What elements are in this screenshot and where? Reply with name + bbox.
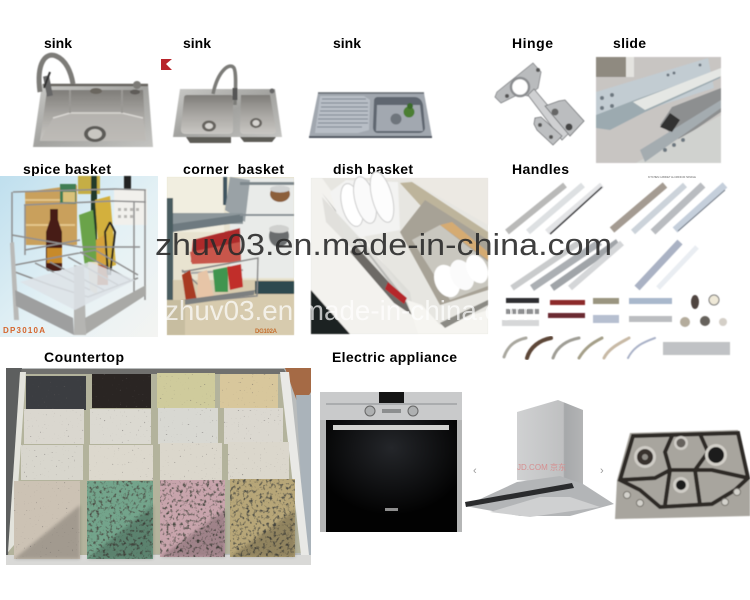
photo: drawer slides [596,57,721,163]
label: electric appliance: Electric appliance [332,349,457,365]
label: sink 2: sink [183,35,211,51]
photo: corner basket [167,177,294,335]
label: model DG102A: DG102A [255,329,278,335]
gallery arrows: ‹ [473,465,477,477]
photo: hinge [495,63,584,145]
photo: double bowl sink with faucet [173,66,282,143]
shadow over lower tiles [14,505,295,559]
label: sink 1: sink [44,35,72,51]
label: hinge: Hinge [512,35,553,51]
watermark: light: zhuv03.en.made-in-china.com [165,295,537,326]
photo: built-in oven [320,392,462,532]
label: countertop: Countertop [44,349,124,365]
fragment: red corner logo [161,59,172,70]
photo: single bowl sink with faucet [33,55,153,147]
label: model DP3010A: DP3010A [3,326,45,335]
photo: countertop samples tray [6,368,311,565]
handles catalog chart [502,176,730,358]
watermark: dark: zhuv03.en.made-in-china.com [155,227,612,262]
label: corner basket: corner basket [183,161,284,177]
photo: spice basket [0,176,158,337]
label: slide: slide [613,35,646,51]
jd.com mark: JD.COM 京东 [517,462,566,472]
catalog header: KITCHEN CABINET ALUMINIUM HANDLE [648,176,696,179]
photo: dish basket drawer [311,169,492,334]
gallery arrow right: › [600,465,604,477]
photo: sink with drainboard [309,93,432,138]
label: handles: Handles [512,161,569,177]
label: dish basket: dish basket [333,161,413,177]
label: spice basket: spice basket [23,161,111,177]
photo: chimney range hood [465,400,614,517]
photo: gas cooktop [615,430,750,519]
label: sink 3: sink [333,35,361,51]
